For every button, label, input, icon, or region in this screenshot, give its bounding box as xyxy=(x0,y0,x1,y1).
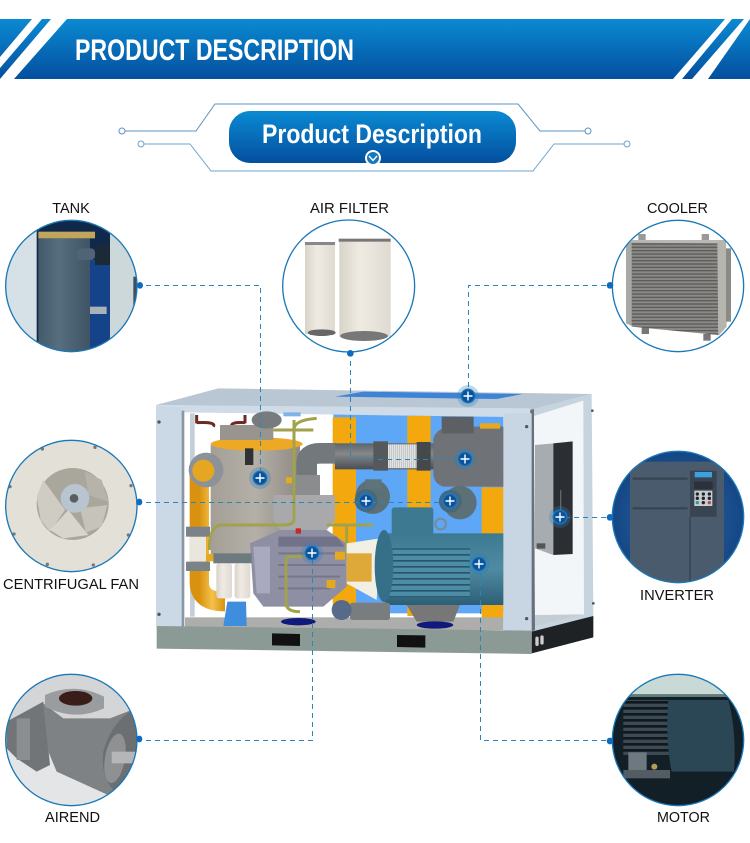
photo: air filter xyxy=(280,217,420,357)
photo: inverter xyxy=(607,450,747,587)
section title pill xyxy=(229,111,516,163)
machine cutaway xyxy=(156,388,595,654)
cabinet side xyxy=(530,394,593,632)
callout: centrifugal fan xyxy=(0,437,143,593)
cabinet frame xyxy=(156,388,595,654)
air pipe and cooler duct xyxy=(307,417,503,487)
callout: air filter xyxy=(280,201,420,357)
banner title: PRODUCT DESCRIPTION xyxy=(75,34,354,67)
airend xyxy=(250,475,347,607)
callout: tank xyxy=(0,201,143,357)
callout: motor xyxy=(607,672,747,826)
main motor xyxy=(347,507,503,622)
label: cooler: COOLER xyxy=(647,201,708,217)
oil filters xyxy=(213,553,252,626)
dashed leader lines xyxy=(146,286,606,740)
photo: motor xyxy=(607,672,747,809)
label: airend: AIREND xyxy=(45,810,100,826)
photo: cooler xyxy=(607,218,747,355)
callout: inverter xyxy=(607,450,747,604)
cabinet interior xyxy=(182,413,505,623)
yellow discharge pipe xyxy=(186,453,225,602)
callout: airend xyxy=(3,672,142,826)
header banner xyxy=(0,19,750,79)
side inverter box xyxy=(535,441,573,555)
label: motor: MOTOR xyxy=(657,810,710,826)
section title frame xyxy=(119,104,630,171)
label: centrifugal fan: CENTRIFUGAL FAN xyxy=(3,577,139,593)
gold elbows and fittings xyxy=(206,477,345,588)
photo: tank xyxy=(0,217,143,357)
section title text: Product Description xyxy=(262,119,482,149)
water pump and mounts xyxy=(281,600,453,629)
photo: centrifugal fan xyxy=(0,437,143,577)
label: air filter: AIR FILTER xyxy=(310,201,389,217)
photo: airend xyxy=(3,672,142,808)
label: tank: TANK xyxy=(52,201,90,217)
olive piping xyxy=(209,418,373,612)
small fans xyxy=(355,479,477,519)
hotspot markers xyxy=(249,385,571,575)
callout: cooler xyxy=(607,201,747,355)
chevron badge xyxy=(365,150,381,166)
oil tank xyxy=(197,411,303,558)
label: inverter: INVERTER xyxy=(640,588,714,604)
